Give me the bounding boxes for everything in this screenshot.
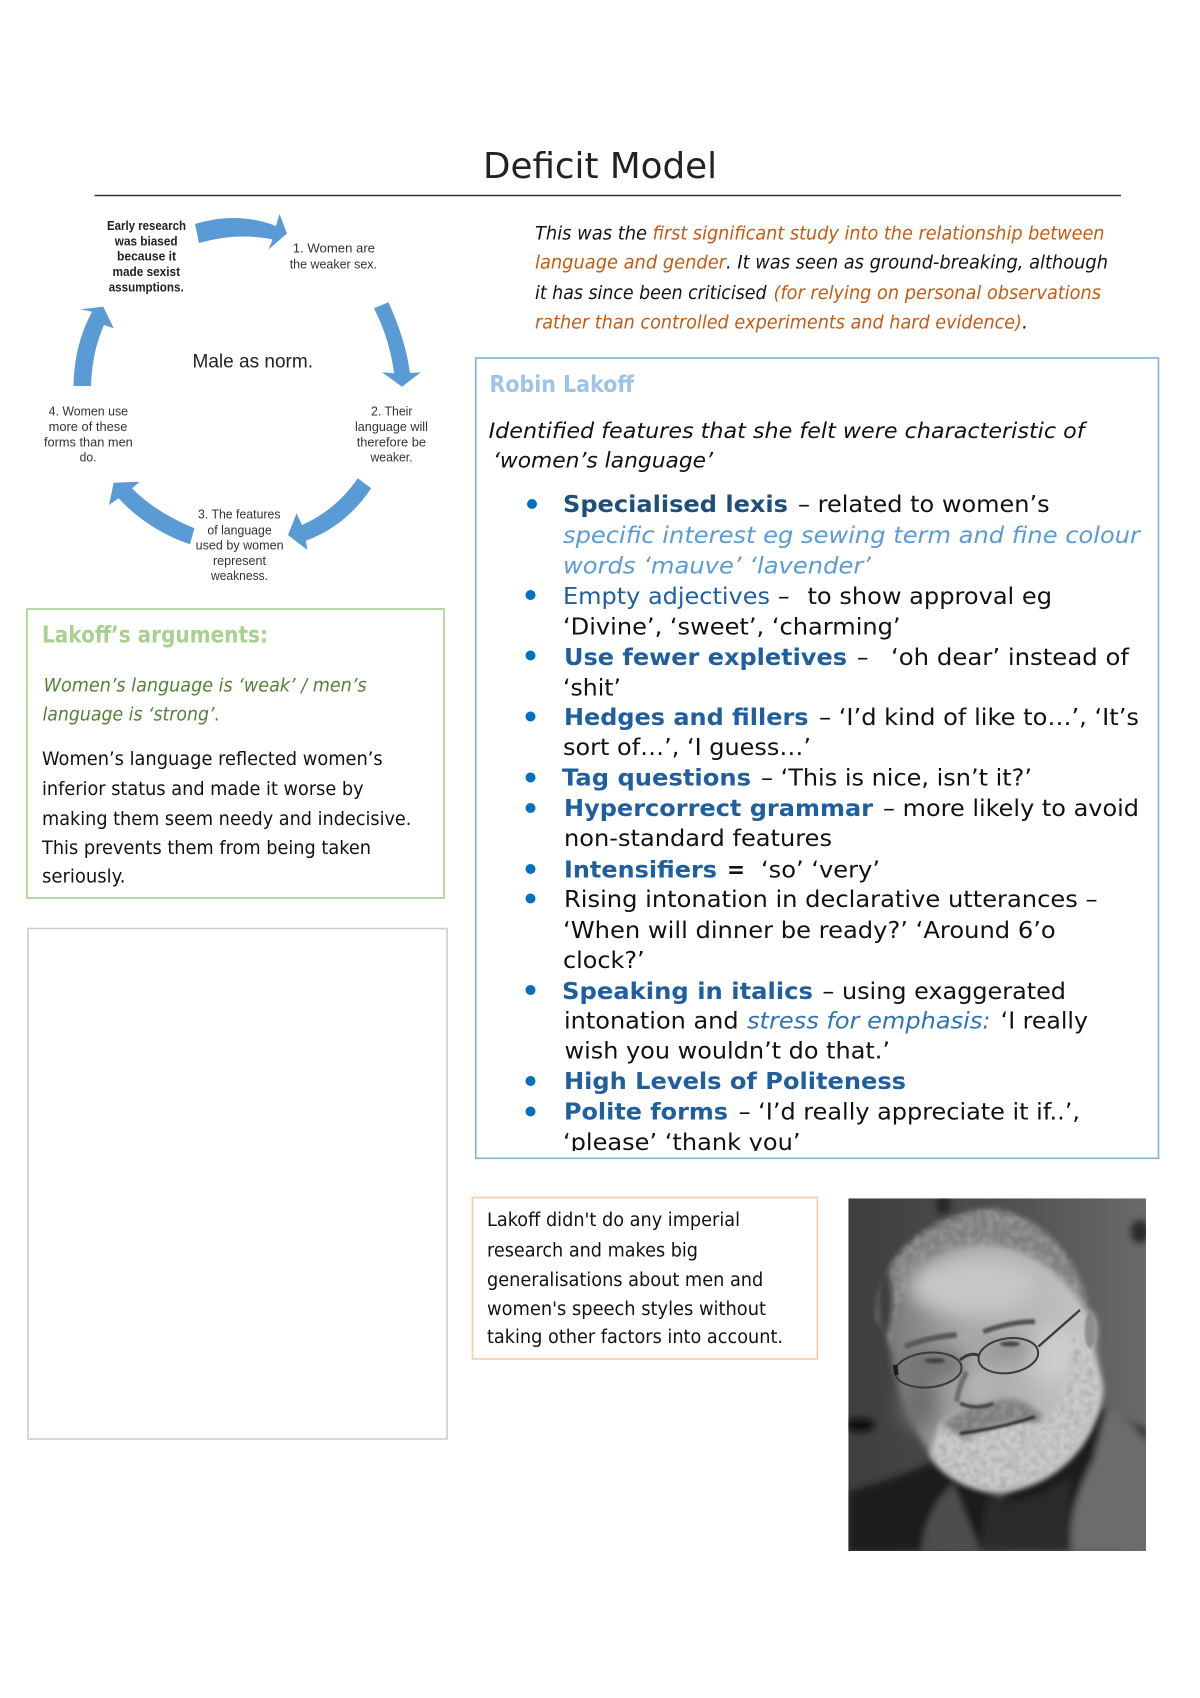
node: point 4: [44, 404, 133, 465]
panel: critique callout: research and makes big: [487, 1241, 698, 1262]
panel: Robin Lakoff features: [476, 358, 1158, 1158]
item: Empty adjectives: ‘Divine’, ‘sweet’, ‘charming’: [563, 614, 901, 640]
item: Use fewer expletives: ‘oh dear’ instead of: [891, 645, 1130, 671]
item: Hedges and fillers: Hedges and fillers: [564, 705, 808, 731]
italic claim: language is ‘strong’.: [42, 704, 220, 726]
title: Deficit Model: [483, 146, 717, 187]
item: Intensifiers: ‘so’ ‘very’: [761, 858, 880, 884]
item: Hedges and fillers: [526, 705, 1139, 761]
face: [890, 1245, 1102, 1492]
item: Specialised lexis: words ‘mauve’ ‘lavender’: [563, 554, 872, 580]
item: Empty adjectives: to show approval eg: [808, 584, 1052, 610]
photo: Robin Lakoff portrait: [845, 1196, 1149, 1551]
hair: [877, 1208, 1088, 1353]
item: Polite forms: – ‘I’d really appreciate it if..’,: [739, 1100, 1080, 1126]
centre label: Male as norm.: [192, 352, 313, 372]
node: early research: [107, 218, 186, 295]
item: Speaking in italics: – using exaggerated: [822, 979, 1066, 1005]
item: Hypercorrect grammar: non-standard features: [564, 826, 832, 852]
body text: Women’s language reflected women’s: [42, 748, 383, 770]
node: point 2: [355, 404, 428, 465]
body text: seriously.: [42, 866, 126, 888]
item: Empty adjectives: Empty adjectives: [563, 584, 770, 610]
item: Empty adjectives: [526, 584, 1052, 640]
panel: critique callout: Lakoff didn't do any imperial: [487, 1210, 740, 1231]
node: point 2: 2. Their: [371, 404, 413, 419]
node: point 2: weaker.: [370, 450, 412, 465]
node: point 4: do.: [80, 450, 96, 465]
description: [489, 419, 1088, 473]
beard: [930, 1333, 1102, 1492]
item: Hypercorrect grammar: Hypercorrect grammar: [564, 796, 874, 822]
item: Hedges and fillers: sort of…’, ‘I guess…’: [563, 735, 811, 761]
panel: critique callout: generalisations about men and: [487, 1270, 763, 1291]
heading: Lakoff’s arguments:: [42, 623, 268, 649]
intro text block: This was the: [535, 222, 647, 244]
item: Specialised lexis: Specialised lexis: [563, 492, 788, 518]
item: Intensifiers: =: [727, 858, 745, 884]
item: Hypercorrect grammar: – more likely to avoid: [883, 796, 1139, 822]
intro text block: .: [1022, 311, 1028, 333]
arrow: point 4 to early research: [74, 307, 114, 386]
item: Polite forms: ‘please’ ‘thank you’: [563, 1130, 800, 1156]
item: Speaking in italics: wish you wouldn’t do that.’: [564, 1038, 890, 1064]
item: Specialised lexis: [527, 492, 1142, 580]
node: point 2: therefore be: [357, 434, 426, 449]
node: point 4: more of these: [49, 419, 127, 434]
item: Rising intonation: clock?’: [563, 948, 645, 974]
intro text block: rather than controlled experiments and hard evidence): [535, 311, 1022, 333]
item: Speaking in italics: intonation and: [564, 1009, 739, 1035]
intro text block: first significant study into the relationship between: [652, 222, 1104, 244]
body text: inferior status and made it worse by: [42, 778, 364, 800]
item: Rising intonation: Rising intonation in declarative utterances –: [564, 887, 1098, 913]
node: point 3: of language: [207, 522, 272, 537]
node: point 3: represent: [213, 553, 266, 568]
node: point 4: 4. Women use: [49, 404, 128, 419]
node: early research: Early research: [107, 218, 186, 233]
panel: empty box: [28, 928, 447, 1439]
item: Specialised lexis: specific interest eg sewing term and fine colour: [563, 523, 1142, 549]
italic claim: Women’s language is ‘weak’ / men’s: [44, 674, 367, 696]
arrow: point 3 to point 4: [109, 482, 194, 544]
item: Use fewer expletives: ‘shit’: [563, 676, 621, 702]
node: point 4: forms than men: [44, 434, 133, 449]
moustache: [942, 1399, 1043, 1438]
panel: Lakoff's arguments: [27, 609, 444, 898]
intro text block: it has since been criticised: [535, 282, 767, 304]
arrow: point 2 to point 3: [288, 478, 371, 550]
node: point 3: used by women: [196, 537, 284, 552]
intro text block: language and gender: [535, 251, 727, 273]
feature list: [526, 492, 1142, 1156]
panel: critique callout: [472, 1198, 817, 1359]
item: Rising intonation: ‘When will dinner be ready?’ ‘Around 6’o: [563, 918, 1056, 944]
item: Polite forms: Polite forms: [564, 1100, 728, 1126]
node: point 1: [290, 241, 377, 271]
body text: making them seem needy and indecisive.: [42, 808, 411, 830]
description: ‘women’s language’: [493, 449, 713, 473]
description: Identified features that she felt were characteristic of: [489, 419, 1088, 443]
cycle diagram: male as norm: [44, 214, 428, 583]
intro text block: . It was seen as ground-breaking, although: [726, 251, 1108, 273]
item: High Levels of Politeness: High Levels of Politeness: [564, 1069, 906, 1095]
node: point 2: language will: [355, 419, 428, 434]
italic claim: [42, 674, 367, 726]
body text: [41, 748, 411, 888]
item: Specialised lexis: – related to women’s: [798, 492, 1050, 518]
item: Tag questions: Tag questions: [562, 766, 751, 792]
intro text block: [535, 222, 1108, 333]
arrow: early research to point 1: [195, 214, 287, 250]
item: Hedges and fillers: – ‘I’d kind of like to…’, ‘It’s: [819, 705, 1139, 731]
glasses: [894, 1310, 1080, 1390]
item: Intensifiers: Intensifiers: [564, 858, 717, 884]
item: Use fewer expletives: Use fewer expletives: [564, 645, 847, 671]
item: Tag questions: – ‘This is nice, isn’t it?’: [761, 766, 1032, 792]
panel: critique callout: women's speech styles without: [487, 1299, 766, 1320]
item: Empty adjectives: –: [778, 584, 790, 610]
body text: This prevents them from being taken: [41, 837, 371, 859]
item: Speaking in italics: Speaking in italics: [562, 979, 813, 1005]
item: Polite forms: [526, 1102, 1078, 1151]
item: Intensifiers: [526, 860, 878, 882]
node: early research: because it: [117, 249, 177, 264]
node: early research: made sexist: [112, 264, 181, 279]
arrow: point 1 to point 2: [374, 302, 421, 387]
node: point 3: weakness.: [210, 568, 268, 583]
panel: critique callout: taking other factors into account.: [487, 1327, 783, 1348]
node: early research: assumptions.: [109, 280, 184, 295]
node: point 1: the weaker sex.: [290, 256, 377, 271]
node: point 1: 1. Women are: [293, 241, 375, 256]
node: point 3: 3. The features: [198, 506, 281, 521]
item: Rising intonation: [526, 887, 1098, 974]
item: Speaking in italics: stress for emphasis:: [747, 1009, 990, 1035]
node: point 3: [196, 506, 284, 583]
item: Hypercorrect grammar: [526, 798, 1137, 846]
heading: Robin Lakoff: [490, 372, 634, 398]
item: Speaking in italics: ‘I really: [1001, 1009, 1088, 1035]
infographic page: [26, 151, 1160, 1551]
item: Speaking in italics: [526, 979, 1088, 1064]
node: early research: was biased: [114, 233, 178, 248]
intro text block: (for relying on personal observations: [774, 282, 1101, 304]
item: Use fewer expletives: –: [857, 645, 868, 671]
item: Use fewer expletives: [526, 648, 1130, 696]
item: Tag questions: [526, 768, 1030, 790]
